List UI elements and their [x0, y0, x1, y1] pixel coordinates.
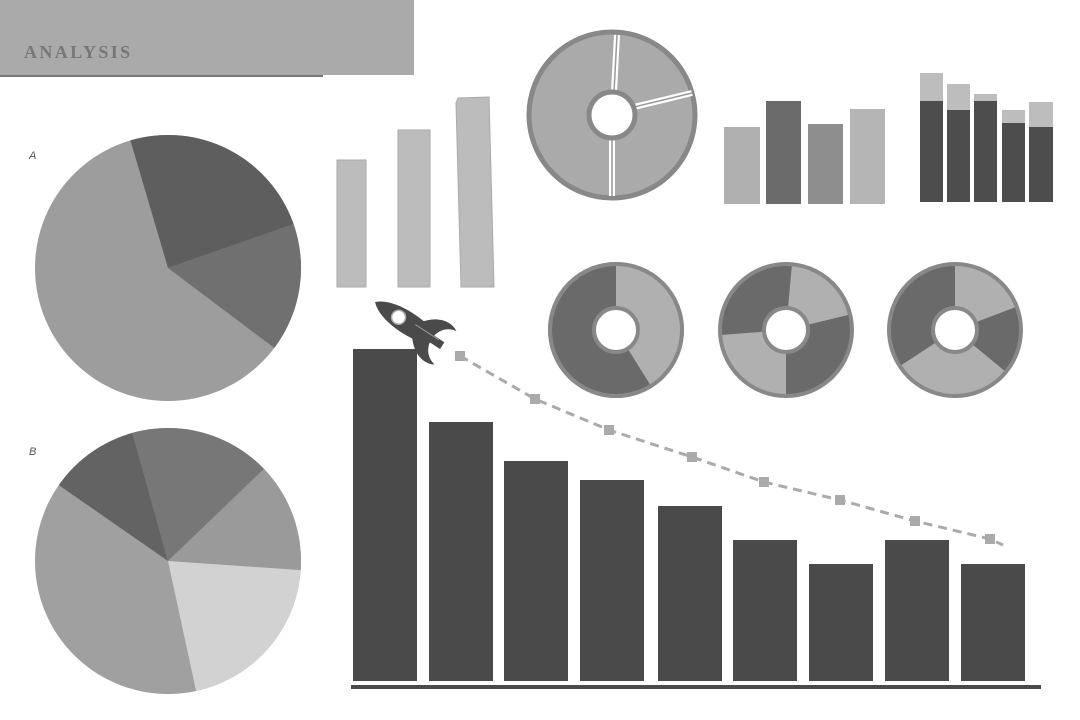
- bar chart small: [724, 101, 885, 204]
- main bar chart: [351, 349, 1041, 689]
- stacked bar chart: [920, 73, 1053, 202]
- title: ANALYSIS: [24, 42, 133, 62]
- 3D bars: [337, 97, 494, 287]
- donut 3: [889, 264, 1021, 396]
- label B: B: [29, 446, 36, 458]
- label A: A: [29, 150, 36, 162]
- pie chart B: [35, 428, 301, 694]
- big donut chart: [529, 32, 695, 198]
- donut 2: [720, 264, 852, 396]
- header banner: [0, 0, 414, 77]
- icon: rocket: [363, 283, 458, 367]
- pie chart A: [35, 135, 301, 401]
- dashed trend line: [455, 351, 1003, 545]
- donut 1: [550, 264, 682, 396]
